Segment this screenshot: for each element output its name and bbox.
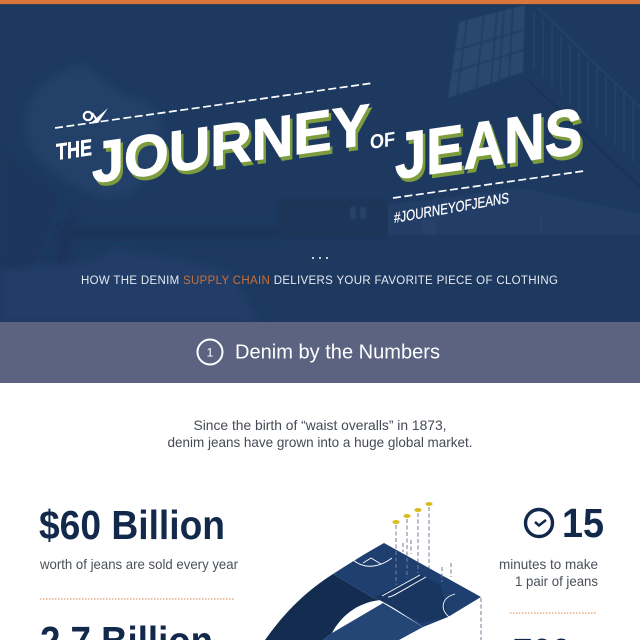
bottom dashed cut line <box>393 171 584 198</box>
stitching <box>353 538 455 617</box>
lower leg <box>323 603 423 640</box>
stat: 15 minutes: minutes to make <box>499 556 598 572</box>
stat: 15 minutes <box>499 500 604 589</box>
title: of: OF <box>370 129 395 154</box>
three dots <box>312 257 328 259</box>
scissors icon <box>84 108 108 123</box>
dashed guide lines <box>396 507 481 640</box>
mid panel <box>374 575 448 623</box>
stat: 15 minutes: 1 pair of jeans <box>515 573 598 589</box>
title: journey: JOURNEY <box>94 96 372 200</box>
divider left <box>40 598 235 600</box>
title: journey: JOURNEY <box>92 92 370 196</box>
intro text: denim jeans have grown into a huge global market. <box>168 434 472 450</box>
background image: shipping container <box>448 5 640 187</box>
section heading: Denim by the Numbers <box>235 340 440 364</box>
section number badge: 1 <box>207 346 214 360</box>
section band: denim by the numbers <box>0 322 640 383</box>
top orange bar <box>0 0 640 5</box>
hashtag: #JOURNEYOFJEANS <box>394 190 509 227</box>
title: jeans: JEANS <box>395 94 582 193</box>
stat: 15 minutes: 15 <box>562 500 604 546</box>
panel: hero background <box>0 5 640 322</box>
background image: tree <box>0 65 164 322</box>
illustration: isometric jeans <box>265 502 481 640</box>
background image: warehouse <box>280 208 543 237</box>
pins <box>392 502 433 524</box>
background image: ground and foliage <box>2 265 75 320</box>
top dashed cut line <box>55 83 373 128</box>
intro text: Since the birth of “waist overalls” in 1873, <box>194 417 446 433</box>
waist panel <box>333 543 481 627</box>
title: the: THE <box>56 134 92 165</box>
intro text <box>168 417 472 450</box>
left leg <box>265 574 380 640</box>
stat: 60 billion <box>39 502 238 572</box>
divider right <box>510 612 596 614</box>
title: jeans: JEANS <box>398 98 584 197</box>
section number badge <box>198 340 222 364</box>
stat: 60 billion: worth of jeans are sold every year <box>39 556 238 572</box>
stat: 60 billion: $60 Billion <box>39 502 225 548</box>
subtitle: HOW THE DENIM SUPPLY CHAIN DELIVERS YOUR FAVORITE PIECE OF CLOTHING <box>81 275 558 287</box>
icon: clock <box>526 510 552 536</box>
